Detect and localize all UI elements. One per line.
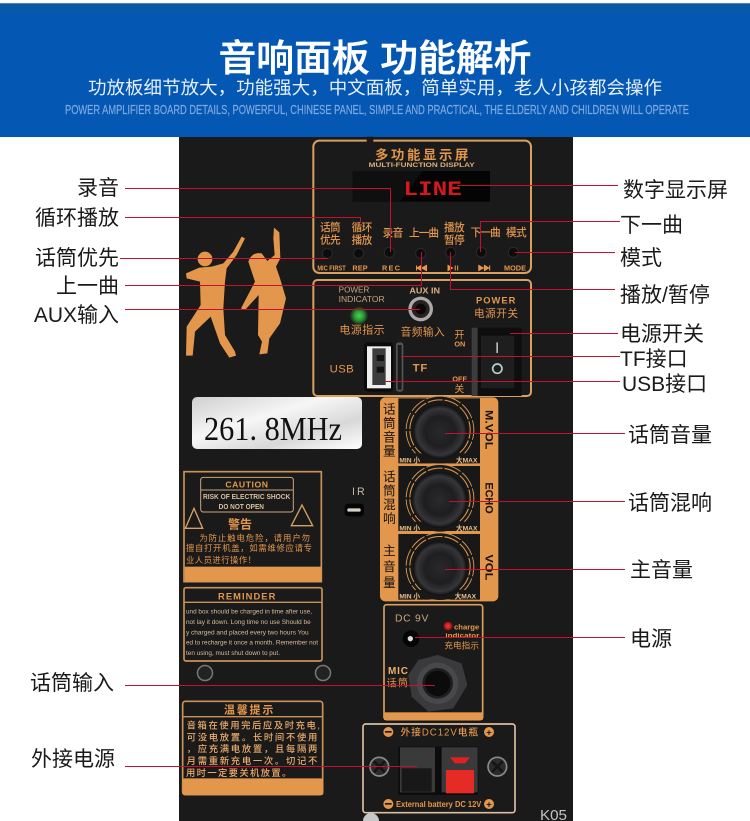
bottom screw <box>363 813 379 821</box>
frequency plate <box>192 397 362 449</box>
button labels: 话筒 <box>320 221 341 234</box>
left labels: 外接电源 <box>31 748 115 771</box>
heading: multi-function display: MULTI-FUNCTION DISPLAY <box>369 163 475 169</box>
screws <box>198 666 330 680</box>
right labels <box>620 179 728 651</box>
panel: warm tips label <box>183 701 323 795</box>
right labels: 电源开关 <box>620 323 704 346</box>
power indicator: POWER <box>339 285 369 295</box>
knob: mic echo: 大MAX <box>456 523 478 532</box>
panel: reminder label: y charged and placed every two hours You <box>186 630 309 637</box>
LED display: LINE <box>403 179 462 202</box>
panel: volume knobs: ECHO <box>483 482 495 514</box>
button captions: REC <box>382 264 401 273</box>
power switch: 开 <box>454 330 464 341</box>
button labels: 下一曲 <box>471 227 501 239</box>
panel: caution label: RISK OF ELECTRIC SHOCK <box>203 494 290 501</box>
panel: reminder label: not lay it down. Long time no use Should be <box>186 619 311 626</box>
charge indicator: indicator <box>445 632 480 639</box>
power switch <box>452 295 522 396</box>
TF slot <box>396 342 427 392</box>
panel: caution label: 为防止触电危险，请用户勿 <box>199 533 310 543</box>
left labels <box>30 177 119 771</box>
button captions <box>317 264 526 273</box>
panel: warm tips label: 可没电放置。长时间不使用 <box>187 732 317 743</box>
panel: external battery: 外接DC12V电瓶 <box>401 726 478 738</box>
LED display <box>353 171 490 202</box>
panel: caution label: DO NOT OPEN <box>219 504 264 511</box>
vertical labels: 音 <box>383 559 396 574</box>
left labels: 话筒优先 <box>35 247 119 270</box>
panel: volume knobs: VOL <box>483 554 495 581</box>
panel: external battery: + <box>486 799 492 809</box>
panel: warm tips label: 月需重新充电一次。切记不 <box>187 755 317 766</box>
button captions: MIC FIRST <box>317 264 346 273</box>
terminal screws <box>370 757 507 776</box>
button labels: 播放 <box>352 234 373 247</box>
panel: warm tips label: ，应充满电放置，且每隔两 <box>187 743 317 754</box>
vertical labels: 话 <box>383 470 396 484</box>
knob: mic echo <box>399 466 478 532</box>
right labels: TF接口 <box>620 348 688 371</box>
panel: display and buttons <box>313 137 531 273</box>
MIC jack: 话筒 <box>387 677 408 690</box>
MIC jack: MIC <box>388 666 408 677</box>
panel: warm tips label: 用时一定要关机放置。 <box>186 767 291 778</box>
title: 音响面板 功能解析 <box>218 38 532 79</box>
knob: main volume: 大MAX <box>455 592 477 601</box>
left labels: 循环播放 <box>35 207 119 230</box>
charge indicator: charge <box>454 624 479 631</box>
knob: mic volume: MIN 小 <box>399 456 420 465</box>
aux in jack: 音频输入 <box>401 325 445 338</box>
panel: reminder label: REMINDER <box>218 591 276 601</box>
right labels: 电源 <box>630 628 672 651</box>
button labels <box>320 221 527 247</box>
left labels: 录音 <box>77 177 119 200</box>
vertical labels: 话 <box>383 402 396 416</box>
right labels: 数字显示屏 <box>623 179 728 202</box>
amplifier panel <box>179 137 573 821</box>
button labels: 上一曲 <box>409 228 439 240</box>
DC 9V socket: DC 9V <box>395 614 428 625</box>
frequency plate: 261. 8MHz <box>204 411 342 448</box>
panel: power and inputs <box>313 280 531 396</box>
button labels: 播放 <box>444 221 465 234</box>
panel: caution label <box>184 472 321 582</box>
panel: caution label: 警告 <box>228 516 252 531</box>
left labels: 话筒输入 <box>30 672 114 695</box>
button labels: 循环 <box>352 221 373 234</box>
USB port <box>330 342 393 392</box>
power switch: 关 <box>454 382 464 395</box>
buttons <box>322 247 518 258</box>
knob: mic echo: MIN 小 <box>399 523 420 532</box>
vertical labels: 量 <box>383 576 396 590</box>
charge indicator: 充电指示 <box>444 640 479 651</box>
panel: reminder label: ed to recharge it once a month. Remember not <box>186 640 318 647</box>
button captions: ▶II <box>447 264 459 273</box>
vertical labels: 主 <box>383 544 396 558</box>
power switch: OFF <box>452 375 468 384</box>
icon: dancing silhouettes <box>186 228 286 358</box>
button captions: ▶▶I <box>477 264 491 273</box>
panel: caution label: CAUTION <box>225 479 268 489</box>
charge indicator <box>443 621 480 651</box>
power indicator <box>339 285 385 337</box>
vertical labels <box>383 402 396 590</box>
panel: caution label: 业人员进行操作！ <box>186 555 256 565</box>
right labels: 话筒音量 <box>628 424 712 447</box>
panel: external battery <box>363 724 515 813</box>
right labels: 播放/暂停 <box>620 284 710 307</box>
knob: mic volume: 大MAX <box>456 456 478 465</box>
knob: main volume <box>399 535 477 601</box>
vertical labels: 响 <box>383 511 396 526</box>
vertical labels: 筒 <box>383 483 396 498</box>
right labels: 主音量 <box>630 559 693 582</box>
panel: reminder label <box>184 588 322 661</box>
callout lines <box>120 186 625 766</box>
right labels: USB接口 <box>622 373 707 396</box>
left labels: AUX输入 <box>34 304 119 327</box>
subtitle: 功放板细节放大，功能强大，中文面板，简单实用，老人小孩都会操作 <box>88 78 662 98</box>
heading: multi-function display: 多功能显示屏 <box>375 146 468 162</box>
vertical labels: 筒 <box>383 415 396 430</box>
IR sensor <box>345 486 365 516</box>
left labels: 上一曲 <box>56 275 119 298</box>
button labels: 暂停 <box>444 234 465 247</box>
panel: volume knobs <box>380 397 498 601</box>
power indicator: INDICATOR <box>339 294 385 304</box>
vertical labels: 混 <box>383 498 396 512</box>
right labels: 下一曲 <box>620 214 683 237</box>
MIC jack <box>387 655 467 712</box>
right labels: 话筒混响 <box>628 492 712 515</box>
power switch: POWER <box>476 295 516 305</box>
knob: mic volume <box>399 398 478 465</box>
panel: external battery: External battery DC 12V <box>396 799 482 809</box>
panel: reminder label: ten using, must shut down to put. <box>186 650 280 657</box>
heading: multi-function display <box>369 146 475 169</box>
TF slot: TF <box>413 363 427 375</box>
aux in jack: AUX IN <box>409 286 440 296</box>
IR sensor: IR <box>352 486 365 498</box>
button labels: 优先 <box>320 234 341 247</box>
panel: volume knobs: M.VOL <box>483 410 495 450</box>
button labels: 模式 <box>506 226 527 239</box>
panel: external battery: + <box>486 727 492 737</box>
knob: main volume: MIN 小 <box>399 592 420 601</box>
power indicator: 电源指示 <box>339 323 385 337</box>
USB port: USB <box>330 364 354 376</box>
button captions: I◀◀I <box>415 264 428 273</box>
panel: caution label: 擅自打开机盖，如需维修应请专 <box>186 543 312 553</box>
power switch: ON <box>454 339 465 348</box>
right labels: 模式 <box>620 247 662 270</box>
button labels: 录音 <box>383 227 404 240</box>
battery terminals <box>398 747 478 795</box>
panel: warm tips label: 温馨提示 <box>224 702 273 716</box>
vertical labels: 音 <box>383 429 396 444</box>
header banner <box>0 0 750 137</box>
button captions: MODE <box>504 264 526 273</box>
panel: DC and MIC inputs <box>384 605 483 720</box>
panel: warm tips label: 音箱在使用完后应及时充电, <box>187 720 320 731</box>
aux in jack <box>401 286 445 338</box>
panel: reminder label: und box should be charged in time after use, <box>186 608 312 615</box>
button captions: REP <box>352 264 368 273</box>
vertical labels: 量 <box>383 444 396 458</box>
power switch: 电源开关 <box>474 307 518 320</box>
